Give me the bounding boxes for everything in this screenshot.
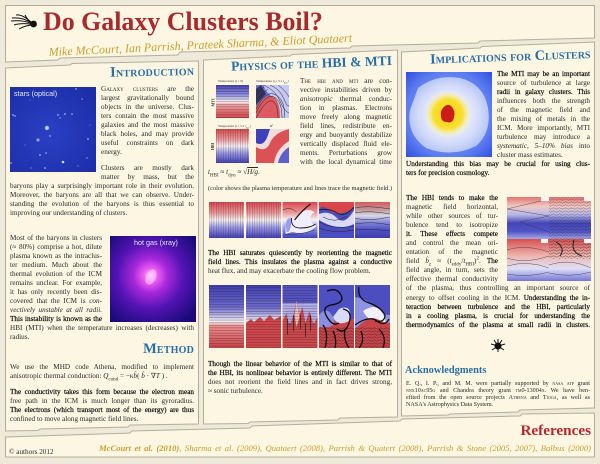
copyright: © authors 2012 <box>9 448 54 456</box>
text: acknowledgments <box>406 380 590 408</box>
text: physics intro <box>300 76 392 166</box>
text: implications paragraph: ters for precision cosmology. <box>406 169 489 177</box>
text: HBI implications paragraph: teraction between turbulence and the HBI, particularly <box>406 303 590 311</box>
text: physics intro: tion in plasmas. Electrons <box>300 104 392 112</box>
image: hot gas xray <box>110 236 196 322</box>
text: HBI implications paragraph: of the plasma, thus controlling an important source of <box>406 284 590 292</box>
text: hot gas paragraph: (≈ 80%) comprise a hot, dilute <box>10 243 102 251</box>
text: reference list: McCourt et al. (2010), Sharma et al. (2009), Quataert (2008), Parrish & Quatert (2008), Parrish & Stone (2005, 2007), Balbus (2000) <box>99 443 591 453</box>
text: method paragraphs <box>10 363 194 423</box>
text: implications paragraph: The MTI may be an important <box>497 70 590 78</box>
small chart labels: Temperature (t = 5.1 t dyn) <box>256 79 289 85</box>
text: hot gas paragraph: This instability is known as the <box>10 315 102 323</box>
text: implications paragraph: radii in galaxy clusters. This <box>497 88 590 96</box>
author line: Mike McCourt, Ian Parrish, Prateek Sharma, & Eliot Quataert <box>48 31 352 59</box>
text: hot gas paragraph: radius. <box>10 333 29 341</box>
text: method paragraphs: anisotropic thermal conduction: Qcond = −κb̂( b̂ · ∇T ) . <box>10 372 168 382</box>
text: MTI behaviour: Though the linear behavior of the MTI is similar to that of <box>208 360 392 368</box>
text: implications paragraph: source of turbulence at large <box>497 79 590 87</box>
text: implications paragraph: influences both the strength <box>497 97 590 105</box>
text: HBI implications paragraph: while other sources of tur- <box>406 212 498 220</box>
text: introduction first paragraph: objects in the universe. Clus- <box>101 103 194 111</box>
text: hot gas paragraph: Most of the baryons in clusters <box>10 234 102 242</box>
text: HBI implications paragraph: The HBI tends to make the <box>406 194 498 202</box>
text: implications paragraph: turbulence may introduce a <box>497 133 590 141</box>
text: introduction second paragraph: baryons play a surprisingly important role in their evolution. <box>10 182 194 190</box>
text: hot gas paragraph: thermal evolution of the ICM <box>10 270 102 278</box>
text: implications paragraph <box>406 70 590 177</box>
text: MTI behaviour <box>208 360 392 395</box>
label: stars optical: stars (optical) <box>14 89 57 98</box>
text: HBI saturation <box>208 249 392 275</box>
text: hot gas paragraph <box>10 234 194 341</box>
text: introduction first paragraph: useful constraints on dark <box>101 139 194 147</box>
icon: starburst ornament <box>491 339 505 352</box>
small chart labels: MTI <box>210 98 216 106</box>
text: HBI implications paragraph: effective thermal conductivity <box>406 275 498 283</box>
text: HBI saturation: field lines. This insulates the plasma against a conductive <box>208 258 392 266</box>
title: Do Galaxy Clusters Boil? <box>43 7 323 36</box>
text: method paragraphs: free path in the ICM is much longer than its gyroradius. <box>10 397 194 405</box>
panel: physics of the HBI and MTI <box>204 50 398 424</box>
text: introduction second paragraph: standing the evolution of the baryons is thus essential to <box>10 200 194 208</box>
text: HBI <box>210 143 215 150</box>
text: introduction second paragraph: Clusters are mostly dark <box>101 164 194 172</box>
text: introduction first paragraph: ters contain the most massive <box>101 112 194 120</box>
text: introduction first paragraph <box>101 84 194 156</box>
icon: comet logo <box>11 15 37 29</box>
text: HBI implications paragraph: and control the mean ori- <box>406 239 498 247</box>
text: HBI implications paragraph: entation of the magnetic <box>406 248 498 256</box>
text: HBI implications paragraph <box>406 194 590 329</box>
text: physics intro: anisotropic thermal conduc- <box>300 95 392 103</box>
text: MTI behaviour: the HBI, its nonlinear behavior is entirely different. The MTI <box>208 369 392 377</box>
text: method paragraphs: The electrons (which transport most of the energy) are thus <box>10 406 194 414</box>
text: hot gas paragraph: vectively unstable at all radii. <box>10 306 102 314</box>
text: hot gas paragraph: remains unclear. For example, <box>10 279 102 287</box>
heading: acknowledgments: Acknowledgments <box>405 365 486 376</box>
text: physics intro: The hbi and mti are con- <box>300 76 392 84</box>
text: introduction first paragraph: energy. <box>101 148 122 156</box>
panel: title banner <box>6 6 594 62</box>
heading: implications: Implications for Clusters <box>429 46 590 68</box>
text: physics intro: ments. Perturbations grow <box>300 149 392 157</box>
chart: HBI evolution strip <box>209 202 390 238</box>
text: introduction first paragraph: black holes, and may provide <box>101 130 194 138</box>
formula: growth time: tHBI ≈ tdyn ≈ √H/g. <box>208 168 260 178</box>
text: acknowledgments: nnx10ac95g and Chandra theory grant tm0-13004x. We have ben- <box>406 388 590 394</box>
chart: linear MTI and HBI panels <box>216 85 289 163</box>
image: cluster simulation <box>406 72 492 157</box>
heading: introduction: Introduction <box>110 63 194 81</box>
text: physics intro: with the local dynamical time <box>300 158 392 166</box>
text: hot gas paragraph: HBI (MTI) when the temperature increases (decreases) with <box>10 324 194 332</box>
text: introduction first paragraph: largest gravitationally bound <box>101 94 194 102</box>
small chart labels <box>210 79 289 150</box>
text: physics intro: vective instabilities driven by <box>300 86 392 94</box>
chart: MTI evolution strip <box>209 285 390 348</box>
text: hot gas paragraph: it has only recently been dis- <box>10 288 102 296</box>
heading: references: References <box>520 422 591 439</box>
text: HBI saturation: The HBI saturates quiescently by reorienting the magnetic <box>208 249 392 257</box>
text: introduction second paragraph: improving our understanding of clusters. <box>10 209 127 217</box>
small chart labels: Temperature (t = 5.1 t dyn) <box>218 124 251 130</box>
text: acknowledgments: efited from the open source projects Athena and Tioga, as well as <box>406 395 590 401</box>
text: introduction second paragraph: matter by mass, but the <box>101 173 194 181</box>
text: HBI implications paragraph: field angle, in turn, sets the <box>406 266 498 274</box>
text: introduction second paragraph <box>10 164 194 217</box>
text: implications paragraph: Understanding this bias may be crucial for using clus- <box>406 160 590 168</box>
text: hot gas paragraph: plasma known as the intraclus- <box>10 252 102 260</box>
heading: method: Method <box>143 341 194 357</box>
text: HBI implications paragraph: bulence tend to isotropize <box>406 221 498 229</box>
text: implications paragraph: of the magnetic field and <box>497 106 590 114</box>
heading: physics: Physics of the HBI & MTI <box>231 53 392 74</box>
text: MTI behaviour: does not reorient the field lines and in fact drives strong, <box>208 378 392 386</box>
panel: references <box>6 413 594 457</box>
text: HBI implications paragraph: thermodynamics of the plasma at small radii in clusters. <box>406 321 590 329</box>
text: method paragraphs: confined to move along magnetic field lines. <box>10 415 138 423</box>
text: HBI implications paragraph: it. These effects compete <box>406 230 498 238</box>
text: physics intro: field lines, redistribute en- <box>300 122 392 130</box>
text: physics intro: vertically displaced fluid ele- <box>300 140 392 148</box>
text: HBI implications paragraph: magnetic field horizontal, <box>406 203 498 211</box>
text: introduction second paragraph: Moreover, the baryons are all that we can observe. Under- <box>10 191 194 199</box>
text: MTI behaviour: ≈ sonic turbulence. <box>208 387 263 395</box>
small chart labels: Temperature (t = 0) <box>218 79 243 83</box>
text: physics intro: ergy and buoyantly destabilize <box>300 131 392 139</box>
text: hot gas paragraph: covered that the ICM is con- <box>10 297 102 305</box>
small chart labels: B² <box>270 124 273 128</box>
image: stars optical <box>10 87 96 172</box>
text: acknowledgments: NASA's Astrophysics Data System. <box>406 402 493 408</box>
panel: introduction <box>6 61 198 431</box>
text: acknowledgments: E. Q., I. P., and M. M. were partially supported by nasa atp grant <box>406 380 590 386</box>
chart: turbulence mosaic <box>507 197 591 281</box>
text: HBI implications paragraph: energy to offset cooling in the ICM. Understanding the in- <box>406 294 590 302</box>
caption: colour note: (color shows the plasma temperature and lines trace the magnetic field.) <box>208 184 392 192</box>
text: hot gas paragraph: ter medium. Much about the <box>10 261 102 269</box>
text: method paragraphs: We use the MHD code Athena, modified to implement <box>10 363 194 371</box>
label: hot gas xray: hot gas (xray) <box>134 238 178 247</box>
text: HBI implications paragraph: field b̂z ≈ (teddy/tHBI)2. The <box>406 257 498 268</box>
text: implications paragraph: cluster mass estimates. <box>497 151 563 159</box>
text: implications paragraph: systematic, 5–10% bias into <box>497 142 590 150</box>
text: introduction first paragraph: galaxies and the most massive <box>101 121 194 129</box>
text: implications paragraph: ICM. More importantly, MTI <box>497 124 590 132</box>
panel: implications for clusters <box>402 42 594 416</box>
text: physics intro: move freely along magnetic <box>300 113 392 121</box>
text: HBI saturation: heat flux, and may exacerbate the cooling flow problem. <box>208 267 370 275</box>
text: introduction first paragraph: Galaxy clusters are the <box>101 84 194 92</box>
text: method paragraphs: The conductivity takes this form because the electron mean <box>10 388 194 396</box>
text: implications paragraph: the mixing of metals in the <box>497 115 590 123</box>
text: HBI implications paragraph: in a cooling plasma, is crucial for understanding the <box>406 312 590 320</box>
